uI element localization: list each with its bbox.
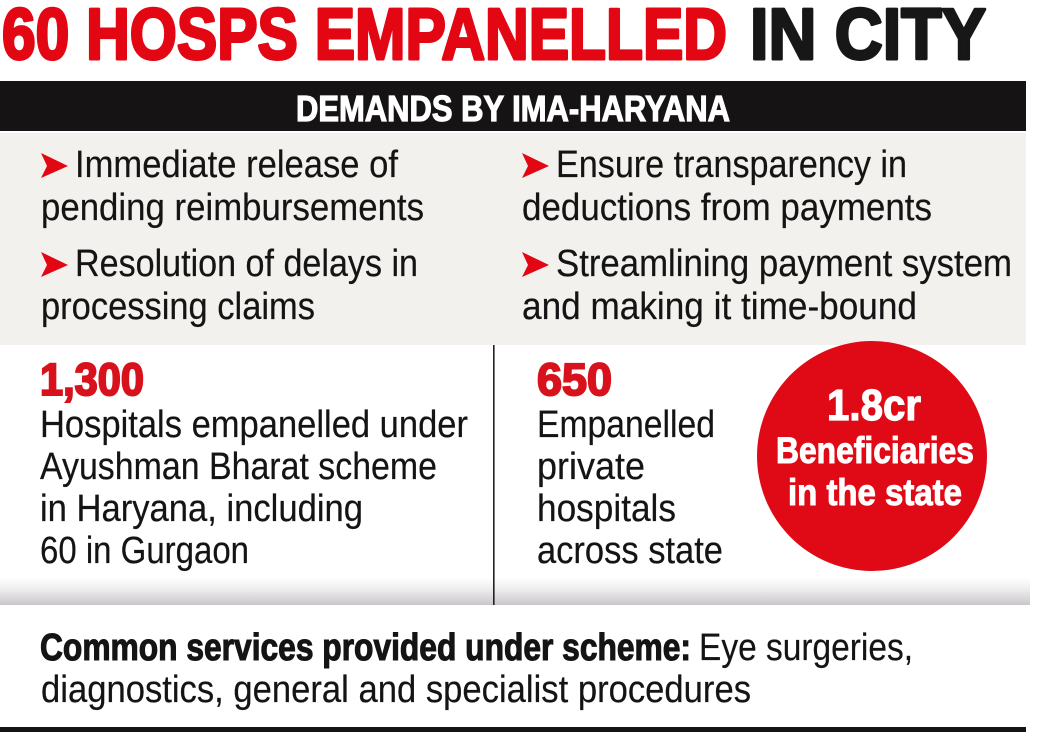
stat: 650 private hospitals <box>537 354 723 572</box>
demand: streamlining payment <box>522 243 1012 328</box>
stat: 650 private hospitals: 650 <box>537 354 612 405</box>
demand: ensure transparency: Ensure transparency in <box>556 144 907 186</box>
demand: immediate release: Immediate release of <box>75 144 398 186</box>
stat: 1,300 hospitals: in Haryana, including <box>40 488 363 530</box>
panel: common services <box>0 605 1026 727</box>
demand: resolution of delays: Resolution of delays in <box>75 243 418 285</box>
demand: resolution of delays <box>41 243 418 328</box>
stat: 1,300 hospitals: 60 in Gurgaon <box>40 530 249 572</box>
callout: 1.8cr beneficiaries <box>757 341 987 571</box>
demand: streamlining payment: Streamlining payment system <box>556 243 1012 285</box>
callout: 1.8cr beneficiaries: in the state <box>788 472 962 513</box>
stat: 1,300 hospitals <box>40 354 468 572</box>
heading bar: demands by IMA-Haryana <box>0 81 1026 131</box>
stat: 1,300 hospitals: 1,300 <box>40 354 144 405</box>
demand: streamlining payment: and making it time-bound <box>522 286 917 328</box>
demand: resolution of delays: processing claims <box>41 286 315 328</box>
stat: 650 private hospitals: Empanelled <box>537 404 715 446</box>
stat: 650 private hospitals: across state <box>537 530 723 572</box>
stat: 1,300 hospitals: Ayushman Bharat scheme <box>40 446 437 488</box>
stat: 650 private hospitals: hospitals <box>537 488 676 530</box>
panel: demands list <box>0 133 1026 345</box>
heading bar: demands by IMA-Haryana: DEMANDS BY IMA-HARYANA <box>296 88 730 129</box>
stat: 1,300 hospitals: Hospitals empanelled under <box>40 404 468 446</box>
panel: common services: Eye surgeries, <box>699 627 913 669</box>
callout: 1.8cr beneficiaries: 1.8cr <box>827 381 921 430</box>
demand: ensure transparency: deductions from payments <box>522 187 932 229</box>
panel: common services: Common services provided under scheme: <box>40 627 691 669</box>
stat: 650 private hospitals: private <box>537 446 645 488</box>
demand: immediate release: pending reimbursements <box>41 187 424 229</box>
demand: ensure transparency <box>522 144 932 229</box>
panel: common services: diagnostics, general and specialist procedures <box>41 669 751 711</box>
demand: immediate release <box>41 144 424 229</box>
callout: 1.8cr beneficiaries: Beneficiaries <box>776 430 974 471</box>
